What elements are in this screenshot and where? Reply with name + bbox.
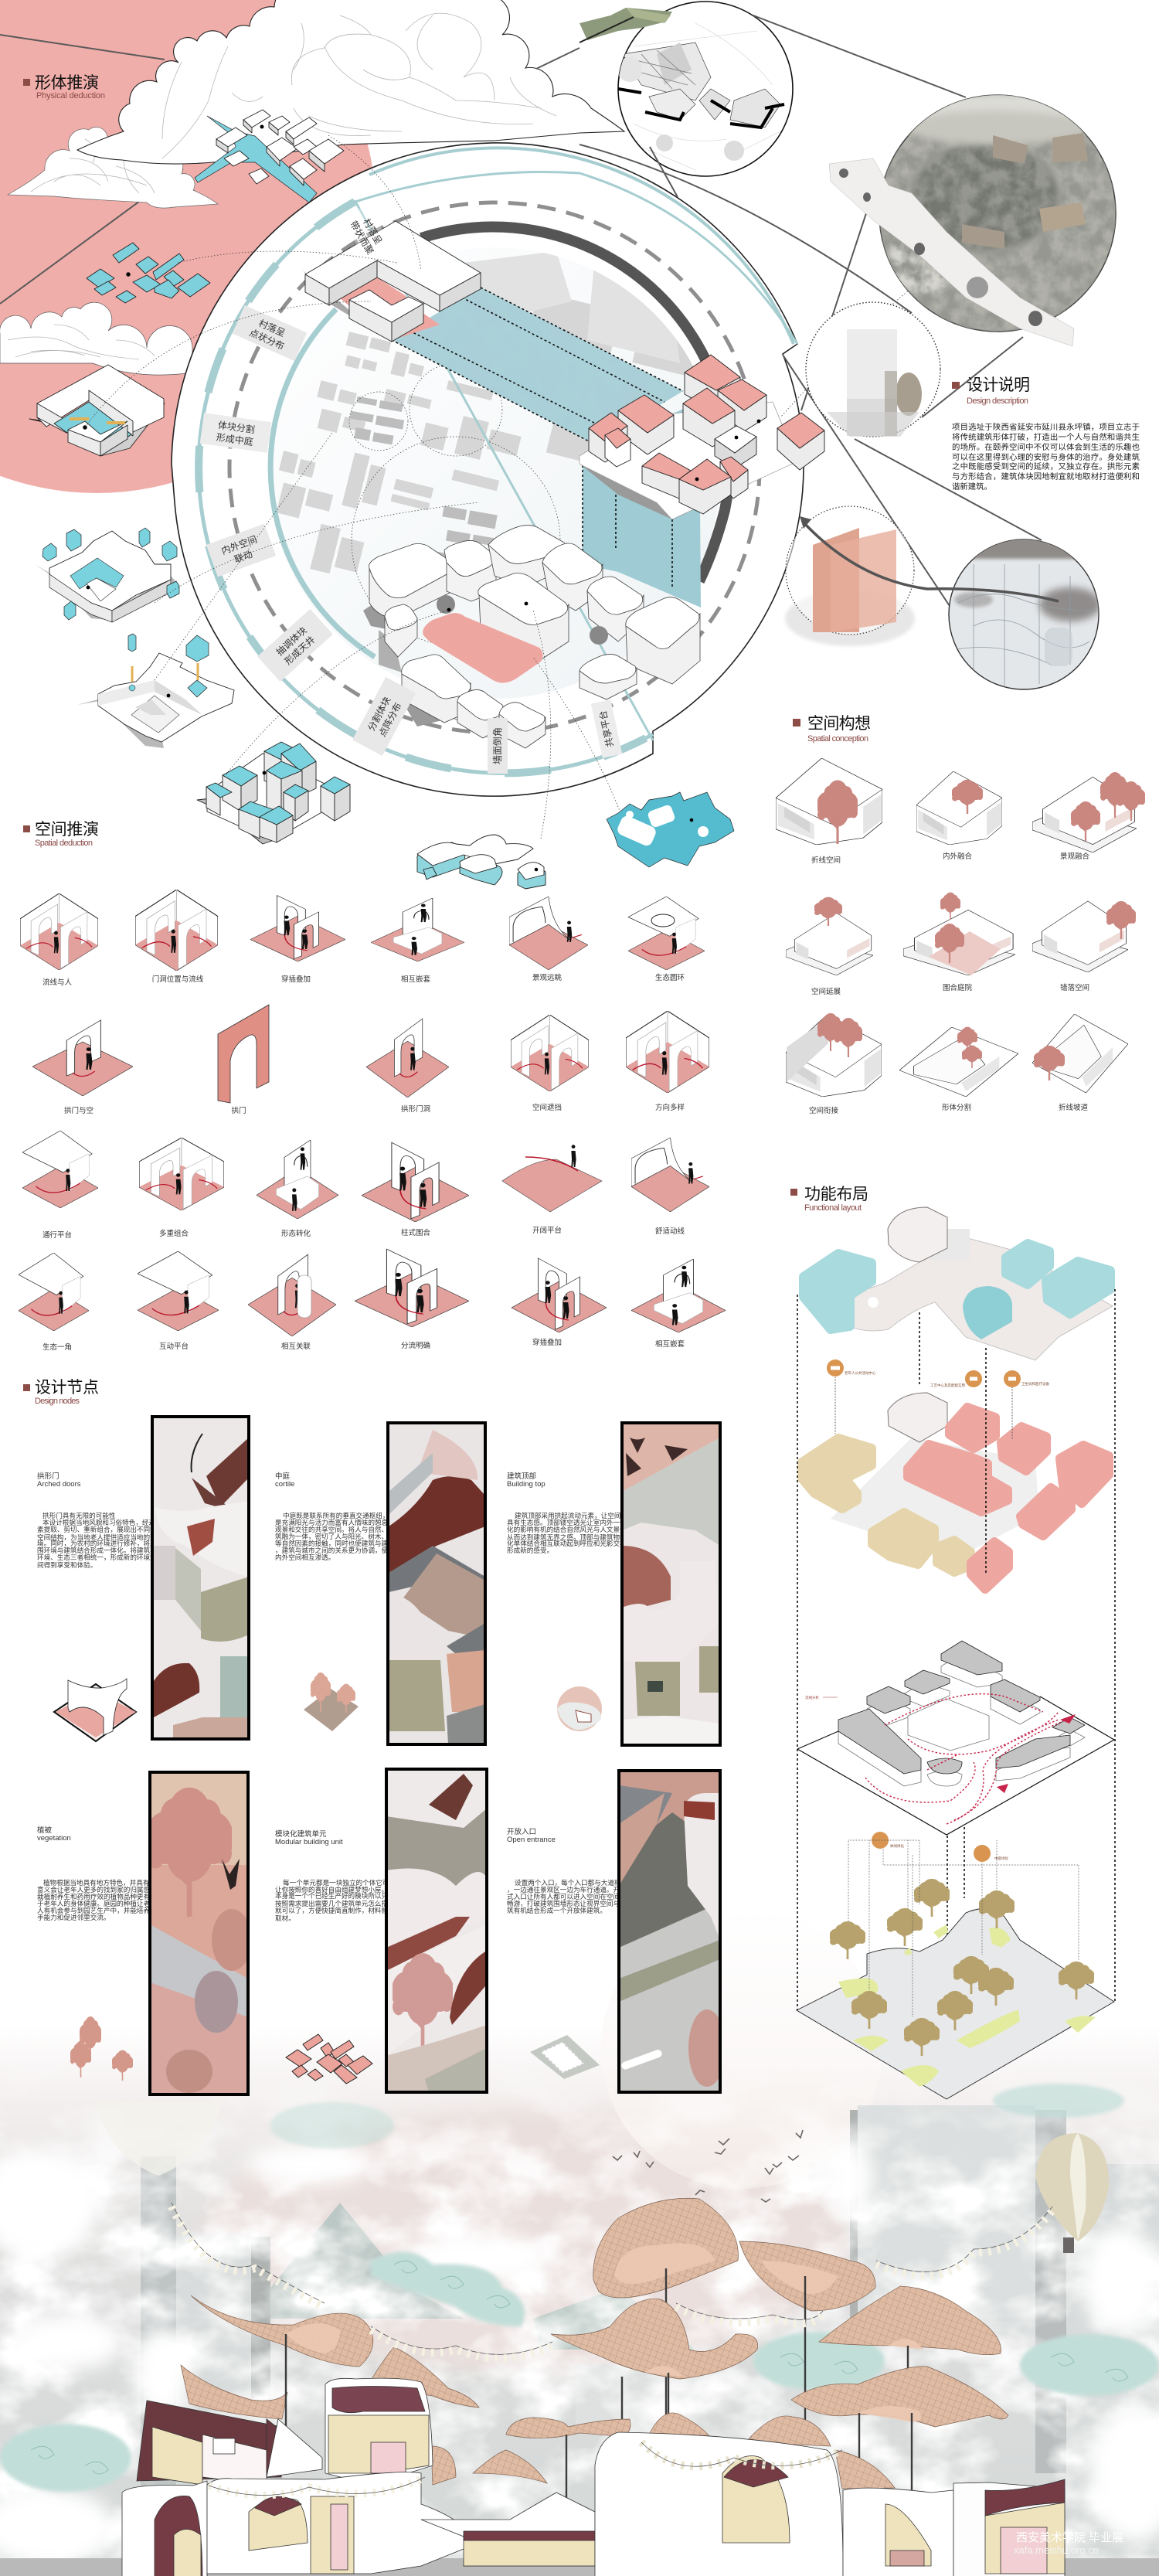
heading: 空间推演 <box>23 821 99 848</box>
cell: 柱式围合: 柱式围合 <box>401 1228 430 1237</box>
heading: 形体推演: Physical deduction <box>36 91 105 100</box>
layout: lower floor functions <box>802 1393 1109 1589</box>
label: 村落呈带状而聚: 带状而聚 <box>348 219 376 257</box>
cell: 生态一角 <box>19 1253 89 1352</box>
ring: dashed grey <box>229 202 760 733</box>
diagram: 景观融合 <box>1032 772 1146 861</box>
node text: 开放入口: Open entrance <box>507 1836 556 1844</box>
dotted circle: pink panels <box>785 506 915 646</box>
cell: 空间遮挡: 空间遮挡 <box>532 1103 562 1112</box>
text: design description: 可以在这里得到心理的安慰与身体的治疗。身处建筑 <box>952 452 1140 462</box>
heading: 功能布局 <box>790 1186 868 1213</box>
cell: 相互关联: 相互关联 <box>281 1342 311 1351</box>
canopy 2 <box>739 2241 875 2442</box>
diagram: 折线坡道 <box>1032 1014 1128 1112</box>
cell: 形态转化: 形态转化 <box>281 1229 311 1238</box>
node text: 建筑顶部: 化的影响有机的结合自然风光与人文景色 <box>507 1525 627 1533</box>
cell: 流线与人 <box>20 893 98 987</box>
cell: 拱形门洞 <box>366 1019 449 1114</box>
scene: blurred clouds <box>0 2107 1159 2558</box>
node text: 建筑顶部: 具有生态感。顶部镂空透光让室内外一体 <box>507 1518 627 1526</box>
canopy 7 <box>181 2365 287 2419</box>
label: 村落呈带状而聚 <box>342 204 393 264</box>
layout: landscape plan <box>797 1832 1114 2099</box>
cell: 拱门与空: 拱门与空 <box>64 1106 93 1115</box>
node icon: crosswalk <box>530 2035 600 2079</box>
node text: 中庭: 中庭既是联系所有的垂直交通枢纽，又 <box>283 1511 396 1519</box>
cloud: lower left small cloud <box>0 302 192 375</box>
node panel: modular unit <box>386 1769 487 2092</box>
diagram: 形体分割 <box>899 1027 1018 1112</box>
node text: 开放入口: 筑有机结合形成一个开放体建筑。 <box>507 1906 607 1914</box>
background: pink circle <box>0 0 376 493</box>
node panel: open entrance <box>619 1771 726 2092</box>
watermark: 西安美术学院 毕业展 <box>1016 2530 1123 2544</box>
cell: 分流明确: 分流明确 <box>401 1341 430 1350</box>
hill top of sketch circle <box>580 8 672 43</box>
canopy 10 <box>473 2450 547 2483</box>
node text: 开放入口: ，一边通往景观区一边为车行通道。开放 <box>507 1885 627 1894</box>
label: 分割体块点阵分布: 分割体块 <box>365 695 393 733</box>
node icon: small trees <box>70 2016 134 2081</box>
cell: 拱门: 拱门 <box>231 1106 246 1115</box>
node text: 建筑顶部: 化单体结合相互联动起到呼应和光影交相 <box>507 1539 627 1547</box>
node text: 开放入口: 设置两个入口，每个入口都与大道相通 <box>515 1878 628 1887</box>
heading: 空间推演: 空间推演 <box>35 821 99 839</box>
layout: function icons and labels <box>827 1359 1049 1439</box>
text: design description <box>952 422 1140 492</box>
scene: building bunting <box>209 2442 842 2496</box>
node text: 拱形门: 间得到享受和体验。 <box>37 1560 97 1569</box>
node text: 中庭: 内外空间相互渗透。 <box>275 1553 335 1561</box>
label: 内外空间联动 <box>206 524 276 577</box>
node icon: cortile diamond <box>304 1673 359 1731</box>
node text: 植被: 人有机会参与到园艺生产中，并能培养动 <box>37 1906 157 1914</box>
diagram: 空间延展: 空间延展 <box>811 987 841 996</box>
text: design description: 的场所。在颐养空间中不仅可以体会到生活的乐趣也 <box>952 442 1140 452</box>
panel: spatial deduction grid <box>19 890 726 1352</box>
canopy 3 <box>551 2299 758 2450</box>
node text: 模块化建筑单元: 模块化建筑单元 <box>275 1829 327 1839</box>
ring label bands <box>200 204 622 774</box>
node text: 拱形门: 素提取、剪切、重新组合，展现出不同的 <box>37 1525 157 1533</box>
node text: 植被: 栽植耐养生和药用疗效的植物品种更有利 <box>37 1892 157 1901</box>
label: 体块分割形成中庭: 体块分割 <box>217 419 256 435</box>
diagram: 形体分割: 形体分割 <box>942 1103 971 1112</box>
node text: 中庭: 筑融为一体，密切了人与阳光、树木、水 <box>275 1532 395 1540</box>
cell: 相互嵌套: 相互嵌套 <box>401 975 430 984</box>
cell: 穿插叠加 <box>250 896 345 984</box>
node text: 模块化建筑单元: 取材。 <box>275 1914 295 1922</box>
node text: 中庭: 观景和交往的共享空间。将人与自然、建 <box>275 1525 395 1533</box>
layout: function icons and labels: 工艺中心及其配套实用 <box>930 1383 965 1388</box>
canopy 9 <box>506 2418 630 2535</box>
node text: 中庭: ，建筑与城市之间的关系更为协调，使室 <box>275 1546 395 1554</box>
inner map disc <box>257 240 720 699</box>
cell: 开阔平台: 开阔平台 <box>532 1226 562 1235</box>
layout: landscape plan: 中庭绿化 <box>994 1856 1008 1861</box>
diagram: 错落空间 <box>1032 901 1137 992</box>
scene: mint curly clouds <box>0 2084 1159 2492</box>
heading: 空间构想: Spatial conception <box>807 734 868 744</box>
cloud: large top cloud <box>77 0 624 164</box>
cell: 穿插叠加: 穿插叠加 <box>281 975 311 984</box>
node text: 中庭 <box>275 1472 396 1561</box>
node text: 植被 <box>37 1826 163 1921</box>
node icon: arched wall <box>54 1679 136 1741</box>
ring: dark grey arc <box>421 227 729 581</box>
cell: 门洞位置与流线 <box>135 890 218 984</box>
node text: 中庭: 是充满阳光与活力而富有人情味的憩息、 <box>275 1518 395 1526</box>
watermark <box>1014 2530 1123 2556</box>
canopy 13 <box>431 2446 456 2485</box>
heading: 空间构想: 空间构想 <box>807 715 871 733</box>
layout: function icons and labels: 老年人公共活动中心 <box>845 1370 876 1376</box>
label: 分割体块点阵分布: 点阵分布 <box>376 701 403 739</box>
node panel: arched doors <box>152 1417 249 1739</box>
layout: circulation plan <box>797 1623 1114 1835</box>
text: design description: 将传统建筑形体打破，打造出一个人与自然和谐共生 <box>952 432 1140 442</box>
layout: circulation plan: 流线分析 <box>805 1695 819 1700</box>
cell: 生态圆环: 生态圆环 <box>655 973 685 982</box>
node text: 模块化建筑单元: 每一个单元都是一块独立的个体它可以 <box>283 1878 396 1887</box>
node text: 开放入口: 式入口让所有人都可以进入空间在空间里 <box>507 1892 627 1901</box>
label: 内外空间联动: 联动 <box>233 549 254 565</box>
node text: 中庭: cortile <box>275 1480 294 1489</box>
cell: 舒适动线: 舒适动线 <box>655 1227 685 1236</box>
label: 村落呈点状分布 <box>233 305 307 361</box>
heading: 空间推演: Spatial deduction <box>35 839 93 848</box>
cell: 门洞位置与流线: 门洞位置与流线 <box>152 975 204 984</box>
top right sketch circle <box>617 2 793 176</box>
node text: 开放入口 <box>507 1827 628 1914</box>
label: 体块分割形成中庭 <box>200 413 271 453</box>
panel: spatial conception diagrams <box>776 758 1146 1115</box>
cell: 柱式围合 <box>362 1142 469 1237</box>
node panel: vegetation <box>145 1772 252 2094</box>
heading: 设计节点 <box>23 1379 99 1406</box>
teal water planes <box>386 286 701 607</box>
node text: 开放入口: 畅游，打破建筑围墙形态让视界空间与建 <box>507 1899 627 1907</box>
scene: birds <box>613 2130 803 2202</box>
cell: 互动平台 <box>138 1251 219 1351</box>
node text: 中庭: 中庭 <box>275 1472 291 1481</box>
cell: 相互嵌套 2: 相互嵌套 <box>655 1339 685 1349</box>
diagram: rounded teal volumes <box>417 835 546 889</box>
cell: 相互关联 <box>248 1254 336 1351</box>
node text: 中庭: 等自然因素的接触，同时也使建筑与建筑 <box>275 1539 395 1547</box>
cell: 穿插叠加 2 <box>512 1258 607 1347</box>
layout: upper floor <box>804 1207 1113 1360</box>
upper white L block <box>303 221 481 342</box>
label: 内外空间联动: 内外空间 <box>220 534 259 556</box>
scene: sky background towers and moon <box>141 1907 1159 2504</box>
node text: 模块化建筑单元 <box>275 1829 396 1922</box>
node text: 拱形门: 境。同时，为农村的环境进行修补，将周 <box>37 1539 157 1547</box>
cell: 穿插叠加 2: 穿插叠加 <box>532 1338 562 1347</box>
cell: 互动平台: 互动平台 <box>159 1342 189 1351</box>
diagram: 围合庭院 <box>903 893 1015 992</box>
node panel: cortile <box>388 1423 485 1744</box>
layout: vertical dashed links <box>797 1289 1115 2098</box>
diagram: teal cross massing <box>195 110 344 202</box>
node text: 建筑顶部 <box>507 1472 628 1554</box>
diagram: 内外融合 <box>916 771 1002 861</box>
label: 墙面倒角: 墙面倒角 <box>492 727 503 764</box>
cell: 通行平台: 通行平台 <box>42 1230 72 1240</box>
heading: 设计说明: Design description <box>967 396 1029 406</box>
cell: 分流明确 <box>355 1249 469 1350</box>
cell: 开阔平台 <box>502 1145 602 1235</box>
node text: 拱形门: 本设计根据当地风貌和习俗特色，经过元 <box>42 1518 162 1526</box>
diagram: 内外融合: 内外融合 <box>943 852 972 861</box>
diagram: 折线坡道: 折线坡道 <box>1059 1103 1088 1112</box>
label: 抽调体块形成天井: 抽调体块 <box>274 625 309 658</box>
cell: 空间遮挡 <box>511 1015 589 1112</box>
node icon: pink modules <box>286 2034 372 2084</box>
scene: village buildings <box>0 2378 1159 2576</box>
diagram: 空间延展 <box>786 897 873 996</box>
node text: 模块化建筑单元: 就可以了，方便快捷简直制作，材料就地 <box>275 1906 395 1914</box>
cloud: left mid cloud <box>8 127 218 208</box>
node text: 模块化建筑单元: Modular building unit <box>275 1838 343 1846</box>
node text: 建筑顶部: Building top <box>507 1480 546 1489</box>
lower rounded white blocks <box>363 526 700 748</box>
cell: 景观远眺: 景观远眺 <box>532 973 562 982</box>
diagram: teal rooftop cubes <box>197 742 350 844</box>
node text: 植被: vegetation <box>37 1834 71 1843</box>
heading: 设计节点: 设计节点 <box>35 1379 99 1397</box>
heading: 功能布局: 功能布局 <box>804 1186 868 1203</box>
watermark: xafa.meishu.org.cn <box>1014 2544 1099 2556</box>
diagram: 错落空间: 错落空间 <box>1060 983 1089 992</box>
cell: 拱门与空 <box>32 1020 133 1115</box>
node text: 拱形门: 环境、生态三者相统一，形成新的环境空 <box>37 1553 157 1561</box>
arrow: curved link <box>800 516 1059 601</box>
cell: 相互嵌套 2 <box>631 1259 726 1349</box>
node text: 建筑顶部: 从而达到建筑无界之感。顶部与建筑物块 <box>507 1533 627 1541</box>
big circle base <box>172 143 804 796</box>
cell: 方向多样 <box>626 1011 709 1112</box>
node text: 模块化建筑单元: 本身是一个个已经生产好的模块所以只要 <box>275 1891 395 1900</box>
node text: 拱形门: 围环境与建筑结合形成一体化。将建筑、 <box>37 1546 157 1554</box>
node text: 植被: 于老年人的身体健康。庭园的种植让老年 <box>37 1899 157 1907</box>
cell: 多重组合: 多重组合 <box>159 1229 189 1238</box>
node text: 植被: 植被 <box>37 1826 53 1835</box>
canopy 8 <box>362 2347 479 2408</box>
heading: 功能布局: Functional layout <box>804 1203 862 1213</box>
cell: 方向多样: 方向多样 <box>655 1103 685 1112</box>
label: 村落呈点状分布: 村落呈 <box>257 318 287 339</box>
cell: 多重组合 <box>139 1138 224 1238</box>
diagram: 空间衔接: 空间衔接 <box>809 1106 838 1115</box>
cell: 拱形门洞: 拱形门洞 <box>401 1104 430 1114</box>
canopy 5 <box>791 2367 1008 2493</box>
node text: 植被: 手能力和促进邻里交流。 <box>37 1913 110 1921</box>
glass maze circle <box>947 537 1101 689</box>
diagram: 景观融合: 景观融合 <box>1060 852 1089 861</box>
node text: 建筑顶部: 形成新的感受。 <box>507 1546 553 1554</box>
scene: balloons <box>96 2102 1109 2253</box>
cell: 舒适动线 <box>631 1138 709 1236</box>
node text: 植被: 意义会让老年人更多的找到家的归属感。 <box>37 1885 157 1894</box>
node panel: building top <box>622 1423 720 1745</box>
heading: 形体推演 <box>23 74 105 100</box>
node text: 建筑顶部: 建筑顶部 <box>507 1472 536 1481</box>
diagram: exploded massing 1 <box>35 528 179 622</box>
cell: 流线与人: 流线与人 <box>42 978 72 987</box>
label: 抽调体块形成天井: 形成天井 <box>282 634 318 667</box>
canopy 12 <box>835 2450 895 2489</box>
dotted circle: glass panel <box>806 302 940 437</box>
diagram: exploded massing 2 <box>77 634 234 748</box>
heading: 空间构想 <box>793 715 871 744</box>
diagram: teal floor plan <box>607 792 734 867</box>
cell: 相互嵌套 <box>371 898 464 984</box>
diagram: courtyard block with arrows <box>29 365 165 456</box>
node text: 植被: 植物根据当地具有地方特色，并具有文化 <box>43 1878 163 1887</box>
node icon: top circle <box>557 1686 602 1731</box>
canopy 11 <box>649 2413 831 2446</box>
heading: 设计说明: 设计说明 <box>967 376 1030 394</box>
diagram: teal blocks field <box>87 243 210 303</box>
diagram: 折线空间 <box>776 758 882 865</box>
cell: 通行平台 <box>22 1131 98 1240</box>
layout: function icons and labels: 卫生局和医疗设备 <box>1021 1381 1049 1387</box>
label: 村落呈点状分布: 点状分布 <box>248 327 286 352</box>
canopy 6 <box>191 2295 373 2450</box>
heading: 设计节点: Design nodes <box>35 1397 80 1406</box>
connector lines upper left <box>0 35 183 304</box>
rings: teal <box>199 148 797 773</box>
diagram: 折线空间: 折线空间 <box>811 856 841 865</box>
heading: 设计说明 <box>952 376 1030 406</box>
connectors right <box>536 15 1042 611</box>
node text: 建筑顶部: 建筑顶部采用拱起流动元素，让空间更 <box>515 1511 628 1519</box>
cell: 景观远眺 <box>509 897 588 982</box>
cell: 生态圆环 <box>628 897 705 982</box>
cell: 拱门 <box>218 1005 269 1115</box>
text: design description: 之中既能感受到空间的延续，又独立存在。拱形元素 <box>952 461 1140 471</box>
layout: landscape plan: 休闲绿化 <box>890 1843 904 1849</box>
node text: 拱形门: 空间结构，为当地老人提供适应当地的环 <box>37 1533 157 1541</box>
diagram: 围合庭院: 围合庭院 <box>943 983 972 992</box>
text: design description: 与方形结合，建筑体块因地制宜就地取材打造便利和 <box>952 471 1140 482</box>
canopy 4 <box>819 2286 1001 2388</box>
cell: 形态转化 <box>257 1140 338 1238</box>
label: 共享平台 <box>591 699 622 758</box>
diagram: 空间衔接 <box>786 1013 882 1115</box>
label: 体块分割形成中庭: 形成中庭 <box>216 431 254 447</box>
scene: bunting strings <box>172 2203 1052 2358</box>
canopy 1 <box>593 2198 738 2442</box>
text: design description: 项目选址于陕西省延安市延川县永坪镇，项目立志于 <box>952 422 1140 432</box>
platform with pink roofed blocks <box>580 355 824 519</box>
scene: woven canopies <box>181 2198 1008 2535</box>
label: 抽调体块形成天井 <box>257 609 333 682</box>
label: 分割体块点阵分布 <box>352 677 416 756</box>
text: design description: 谐新建筑。 <box>952 482 992 492</box>
label: 村落呈带状而聚: 村落呈 <box>361 216 384 247</box>
node text: 拱形门 <box>37 1472 162 1569</box>
node text: 模块化建筑单元: 按照需求提出需要几个建筑单元怎么搭设 <box>275 1899 395 1907</box>
node text: 模块化建筑单元: 让你按照你的喜好自由组建梦想小屋。它 <box>275 1885 395 1894</box>
node text: 开放入口: 开放入口 <box>507 1827 536 1836</box>
background: lower sky wash <box>0 2025 1159 2576</box>
photo circle: cave dwellings <box>829 93 1120 346</box>
node text: 拱形门: 拱形门 <box>37 1472 59 1481</box>
cell: 生态一角: 生态一角 <box>42 1342 72 1352</box>
node text: 拱形门: 拱形门具有无限的可能性 <box>42 1511 116 1519</box>
dotted leader arcs <box>85 135 981 839</box>
node text: 拱形门: Arched doors <box>37 1480 81 1489</box>
heading: 形体推演: 形体推演 <box>35 74 99 92</box>
label: 墙面倒角 <box>488 718 508 774</box>
label: 共享平台: 共享平台 <box>596 710 616 748</box>
